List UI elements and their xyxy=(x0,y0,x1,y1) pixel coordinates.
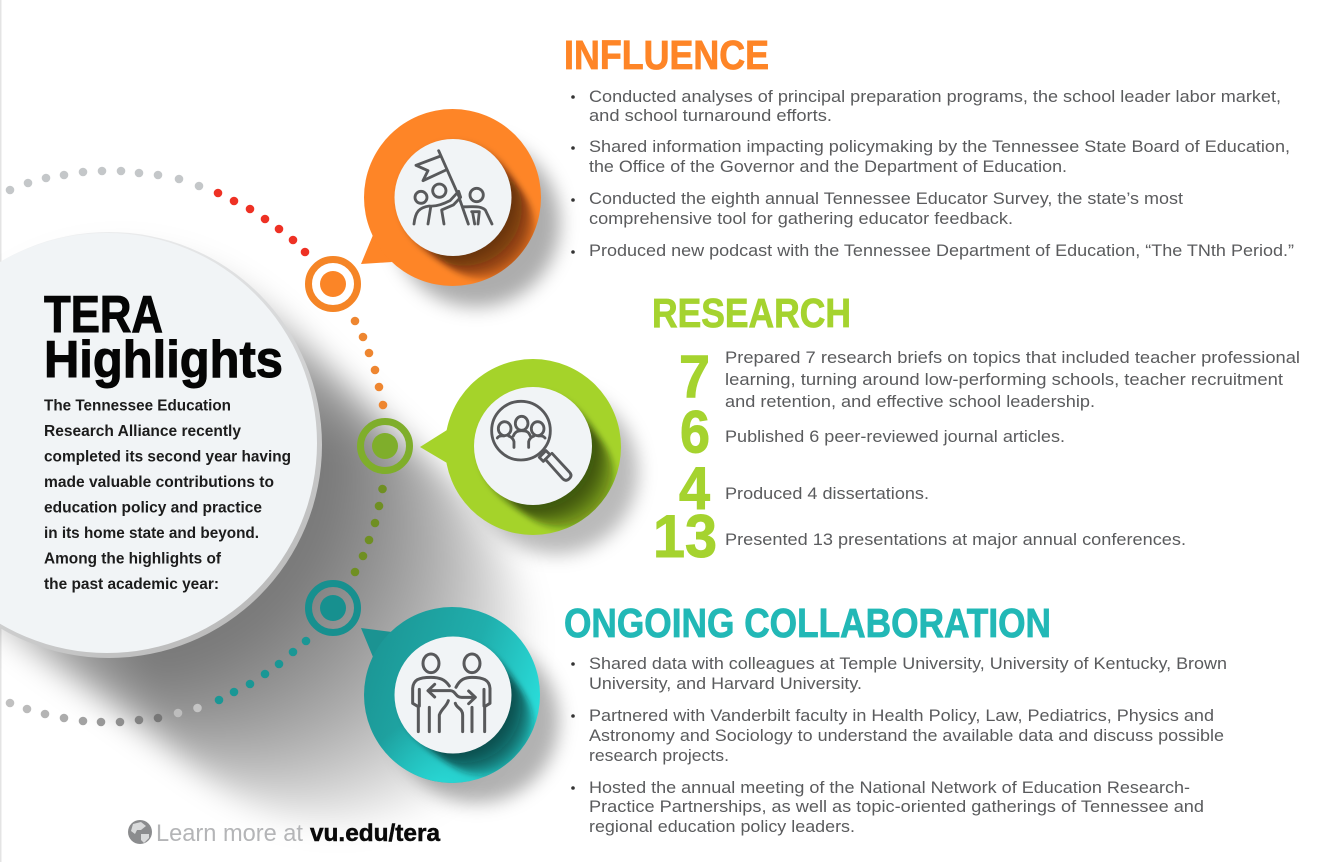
dotted arc: orange xyxy=(351,317,387,409)
icon: magnifier over people xyxy=(492,401,571,480)
list: ongoing collaboration: Shared data with colleagues at Temple University, University of Kentucky, Brown xyxy=(589,655,1227,673)
list: ongoing collaboration: Astronomy and Sociology to understand the available data and discuss possible xyxy=(589,727,1224,745)
intro text xyxy=(44,398,291,593)
bubble: ongoing collaboration xyxy=(361,607,559,803)
stat numbers xyxy=(653,343,717,570)
icon: two people exchanging xyxy=(413,654,490,732)
list: ongoing collaboration: Partnered with Vanderbilt faculty in Health Policy, Law, Pediatrics, Physics and xyxy=(589,707,1214,725)
list: research: learning, turning around low-performing schools, teacher recruitment xyxy=(725,371,1283,389)
list: influence: Produced new podcast with the Tennessee Department of Education, “The TNth Period.” xyxy=(589,242,1294,260)
intro text: made valuable contributions to xyxy=(44,474,274,491)
marker: green target xyxy=(360,422,410,470)
list: influence: comprehensive tool for gathering educator feedback. xyxy=(589,210,1013,228)
intro text: completed its second year having xyxy=(44,448,291,466)
dotted arc: bottom grey xyxy=(6,699,202,726)
intro text: in its home state and beyond. xyxy=(44,525,259,542)
dotted arc: teal xyxy=(215,637,310,704)
intro text: Research Alliance recently xyxy=(44,423,241,440)
list: ongoing collaboration: Practice Partnerships, as well as topic-oriented gatherings of Tennessee and xyxy=(589,798,1204,816)
list: influence: and school turnaround efforts. xyxy=(589,107,832,125)
icon: globe xyxy=(128,820,152,844)
list: ongoing collaboration: Hosted the annual meeting of the National Network of Education Research- xyxy=(589,779,1190,797)
intro text: education policy and practice xyxy=(44,500,262,516)
stat numbers: 7 xyxy=(679,343,710,410)
long shadow of main circle xyxy=(0,243,533,831)
list: research: and retention, and effective school leadership. xyxy=(725,393,1095,411)
marker: orange target xyxy=(308,260,358,308)
list: influence: the Office of the Governor and the Department of Education. xyxy=(589,158,1067,176)
stat numbers: 4 xyxy=(679,455,711,522)
main heading: TERA xyxy=(44,286,163,344)
footer link: Learn more at xyxy=(156,820,303,847)
main heading: Highlights xyxy=(44,331,283,389)
list: influence xyxy=(571,88,1294,260)
dotted arc: green xyxy=(351,485,387,576)
intro text: the past academic year: xyxy=(44,576,219,593)
list: research: Published 6 peer-reviewed journal articles. xyxy=(725,428,1065,446)
bubble: influence xyxy=(361,109,560,307)
list: research: Presented 13 presentations at major annual conferences. xyxy=(725,531,1186,549)
list: ongoing collaboration: regional education policy leaders. xyxy=(589,818,855,836)
stat numbers: 6 xyxy=(680,398,710,466)
icon: people raising a flag xyxy=(414,151,492,224)
list: influence: Conducted the eighth annual Tennessee Educator Survey, the state’s most xyxy=(589,190,1183,208)
dotted arc: red xyxy=(214,189,309,256)
intro text: The Tennessee Education xyxy=(44,398,231,414)
list: ongoing collaboration: research projects. xyxy=(589,747,729,765)
heading: ongoing collaboration: ONGOING COLLABORATION xyxy=(564,600,1051,646)
intro text: Among the highlights of xyxy=(44,550,222,568)
list: research: Produced 4 dissertations. xyxy=(725,485,929,503)
list: ongoing collaboration xyxy=(571,655,1227,836)
page edge xyxy=(0,0,2,862)
footer link xyxy=(156,820,441,847)
marker: teal target xyxy=(308,584,358,632)
panel: main circle xyxy=(0,232,322,658)
list: research: Prepared 7 research briefs on topics that included teacher professional xyxy=(725,349,1300,367)
stat numbers: 13 xyxy=(653,503,717,570)
heading: influence: INFLUENCE xyxy=(564,32,769,78)
list: research xyxy=(725,349,1300,549)
dotted arc: top grey xyxy=(6,167,203,194)
list: ongoing collaboration: University, and Harvard University. xyxy=(589,675,862,693)
list: influence: Shared information impacting policymaking by the Tennessee State Board of Education, xyxy=(589,138,1290,156)
main heading xyxy=(44,286,283,389)
bubble: research xyxy=(420,359,638,554)
list: influence: Conducted analyses of principal preparation programs, the school leader labor market, xyxy=(589,88,1281,106)
heading: research: RESEARCH xyxy=(652,290,851,336)
footer link: vu.edu/tera xyxy=(310,820,441,847)
